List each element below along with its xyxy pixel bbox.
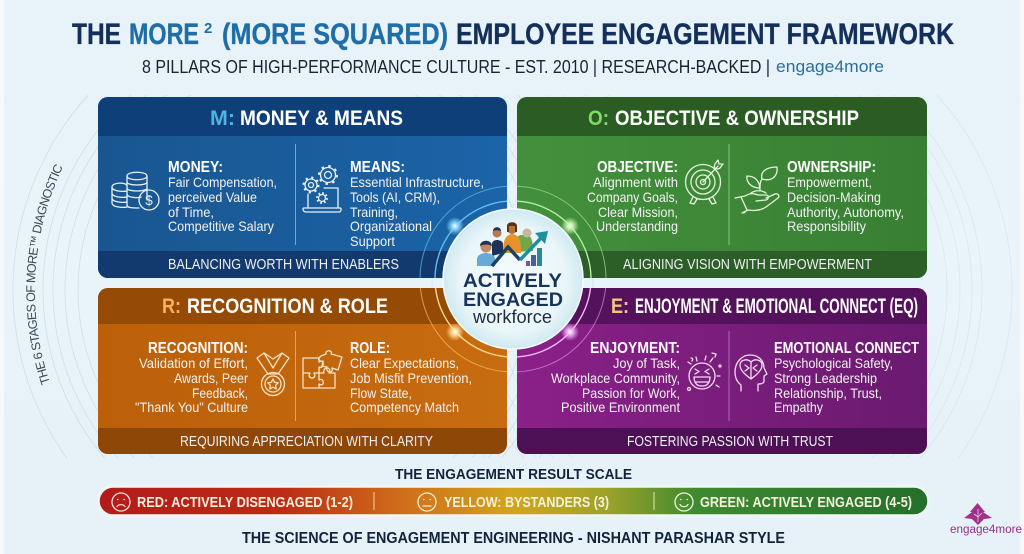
text: money: Competitive Salary (168, 218, 274, 234)
text: enjoyment: Passion for Work, (582, 385, 680, 401)
label: yellow bystanders: YELLOW: BYSTANDERS (3) (444, 495, 609, 511)
text: recognition: Awards, Peer (174, 370, 248, 386)
heading: e enjoyment and emotional connect: E: (611, 294, 629, 318)
text: ownership: OWNERSHIP: (787, 159, 876, 176)
text: emotional connect: EMOTIONAL CONNECT (774, 340, 919, 357)
text: objective: Clear Mission, (598, 204, 678, 220)
label: green actively engaged: GREEN: ACTIVELY ENGAGED (4-5) (700, 495, 912, 511)
text: means: MEANS: (350, 159, 405, 176)
text: means: Essential Infrastructure, (350, 174, 484, 190)
center badge: actively engaged workforce (443, 209, 583, 349)
text: recognition: Feedback, (192, 385, 248, 401)
text: objective (587, 159, 678, 234)
icon: medal (257, 353, 289, 396)
icon: head with brain heart (735, 355, 767, 391)
text: enjoyment: Positive Environment (561, 399, 680, 415)
icon: coins: $ (145, 193, 153, 208)
label: red actively disengaged: RED: ACTIVELY DISENGAGED (1-2) (137, 495, 353, 511)
panel: money and means (98, 97, 507, 278)
footer: requiring appreciation with clarity: REQUIRING APPRECIATION WITH CLARITY (180, 434, 433, 450)
heading: m money and means: M: (210, 106, 235, 130)
text: role: Competency Match (350, 399, 459, 415)
icon: target (686, 160, 723, 204)
logo: engage4more (950, 503, 1022, 536)
footer tagline: THE SCIENCE OF ENGAGEMENT ENGINEERING - NISHANT PARASHAR STYLE (242, 530, 785, 547)
text: actively engaged: ACTIVELY (463, 271, 562, 292)
text: means: Support (350, 233, 395, 249)
heading: o objective and ownership: OBJECTIVE & OWNERSHIP (615, 106, 859, 130)
icon: hand with plant (735, 167, 779, 213)
text: emotional connect: Empathy (774, 399, 823, 415)
text: emotional connect: Strong Leadership (774, 370, 877, 386)
text: ownership: Decision-Making (787, 189, 881, 205)
footer: fostering passion with trust: FOSTERING PASSION WITH TRUST (627, 434, 833, 450)
icon: gears and laptop (303, 166, 341, 212)
text: ownership (787, 159, 904, 234)
panel: recognition and role (98, 288, 507, 454)
text: ownership: Authority, Autonomy, (787, 204, 904, 220)
arc label: the 6 stages of more diagnostic: THE 6 STAGES OF MORE™ DIAGNOSTIC (26, 164, 62, 386)
title: (MORE SQUARED) (222, 18, 448, 51)
text: money: MONEY: (168, 159, 223, 176)
footer: balancing worth with enablers: BALANCING WORTH WITH ENABLERS (168, 257, 399, 273)
heading: r recognition and role: RECOGNITION & ROLE (187, 294, 388, 318)
icon: coins (112, 172, 159, 210)
text: emotional connect (774, 340, 919, 415)
text: enjoyment: Joy of Task, (613, 355, 680, 371)
panel: enjoyment and emotional connect (517, 288, 927, 454)
text: role: Flow State, (350, 385, 412, 401)
heading: the engagement result scale: THE ENGAGEMENT RESULT SCALE (395, 467, 632, 483)
text: recognition: "Thank You" Culture (135, 399, 248, 415)
subtitle: 8 PILLARS OF HIGH-PERFORMANCE CULTURE - EST. 2010 | RESEARCH-BACKED | (142, 57, 770, 77)
text: role: Job Misfit Prevention, (350, 370, 472, 386)
text: means: Training, (350, 204, 398, 220)
text: money: perceived Value (168, 189, 257, 205)
heading: o objective and ownership: O: (588, 106, 609, 130)
heading: m money and means: MONEY & MEANS (240, 106, 403, 130)
text: recognition (135, 340, 248, 415)
text: means: Organizational (350, 218, 432, 234)
text: role: ROLE: (350, 340, 390, 357)
heading: e enjoyment and emotional connect (611, 294, 918, 318)
heading: r recognition and role: R: (162, 294, 181, 318)
text: enjoyment: Workplace Community, (551, 370, 680, 386)
icon: puzzle (303, 351, 342, 388)
text: actively engaged (463, 271, 563, 327)
icon: neutral face (418, 493, 436, 511)
text: emotional connect: Psychological Safety, (774, 355, 893, 371)
title (72, 18, 954, 51)
text: enjoyment: ENJOYMENT: (590, 340, 680, 357)
icon: happy face (675, 493, 693, 511)
text: ownership: Empowerment, (787, 174, 872, 190)
logo: engage4more: engage4more (950, 524, 1022, 536)
title: 2 (204, 20, 212, 37)
icon: sad face (112, 493, 130, 511)
text: role: Clear Expectations, (350, 355, 459, 371)
text: money: Fair Compensation, (168, 174, 277, 190)
text: objective: Understanding (596, 218, 678, 234)
title: MORE (129, 18, 199, 51)
text: objective: Company Goals, (587, 189, 678, 205)
text: actively engaged: workforce (472, 307, 552, 327)
text: enjoyment (551, 340, 680, 415)
text: money: of Time, (168, 204, 214, 220)
text: recognition: RECOGNITION: (148, 340, 248, 357)
text: objective: Alignment with (593, 174, 678, 190)
text: recognition: Validation of Effort, (139, 355, 248, 371)
text: money (168, 159, 277, 234)
text: role (350, 340, 472, 415)
text: means (350, 159, 484, 249)
text: ownership: Responsibility (787, 218, 866, 234)
result scale bar (98, 486, 928, 516)
text: means: Tools (AI, CRM), (350, 189, 440, 205)
text: emotional connect: Relationship, Trust, (774, 385, 882, 401)
footer: aligning vision with empowerment: ALIGNING VISION WITH EMPOWERMENT (623, 257, 872, 273)
text: objective: OBJECTIVE: (597, 159, 678, 176)
panel: objective and ownership (517, 97, 927, 278)
subtitle: engage4more (776, 57, 884, 76)
icon: team with growth arrow (477, 222, 548, 266)
text: actively engaged: ENGAGED (463, 290, 563, 311)
icon: laughing face (688, 353, 721, 390)
title: THE (72, 18, 121, 51)
